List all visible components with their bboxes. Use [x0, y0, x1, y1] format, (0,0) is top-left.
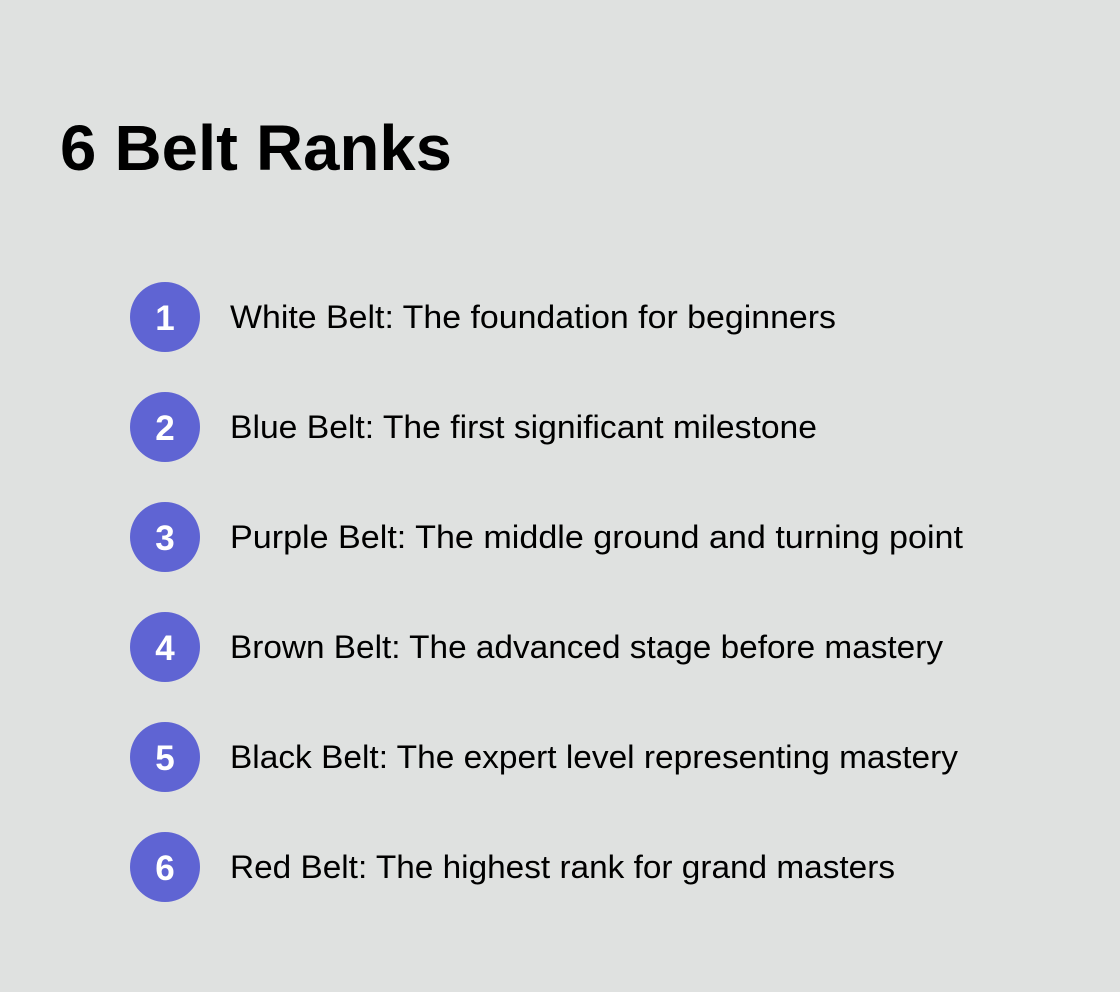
- list item 1: White Belt: The foundation for beginners: [230, 299, 836, 335]
- list item 3: [130, 502, 963, 572]
- list item 5: [130, 722, 958, 792]
- list item 6: Red Belt: The highest rank for grand masters: [230, 849, 895, 885]
- list item 1: [130, 282, 836, 352]
- list item 1: 1: [155, 299, 175, 338]
- list item 5: Black Belt: The expert level representing mastery: [230, 739, 958, 775]
- list item 2: Blue Belt: The first significant milestone: [230, 409, 817, 445]
- list item 5: 5: [155, 739, 175, 778]
- list item 4: Brown Belt: The advanced stage before mastery: [230, 629, 943, 665]
- list item 6: 6: [155, 849, 175, 888]
- list item 2: [130, 392, 817, 462]
- list item 4: 4: [155, 629, 175, 668]
- title: 6 Belt Ranks: [60, 112, 452, 184]
- list item 3: Purple Belt: The middle ground and turning point: [230, 519, 963, 555]
- list item 2: 2: [155, 409, 175, 448]
- list item 4: [130, 612, 943, 682]
- list item 6: [130, 832, 895, 902]
- list item 3: 3: [155, 519, 175, 558]
